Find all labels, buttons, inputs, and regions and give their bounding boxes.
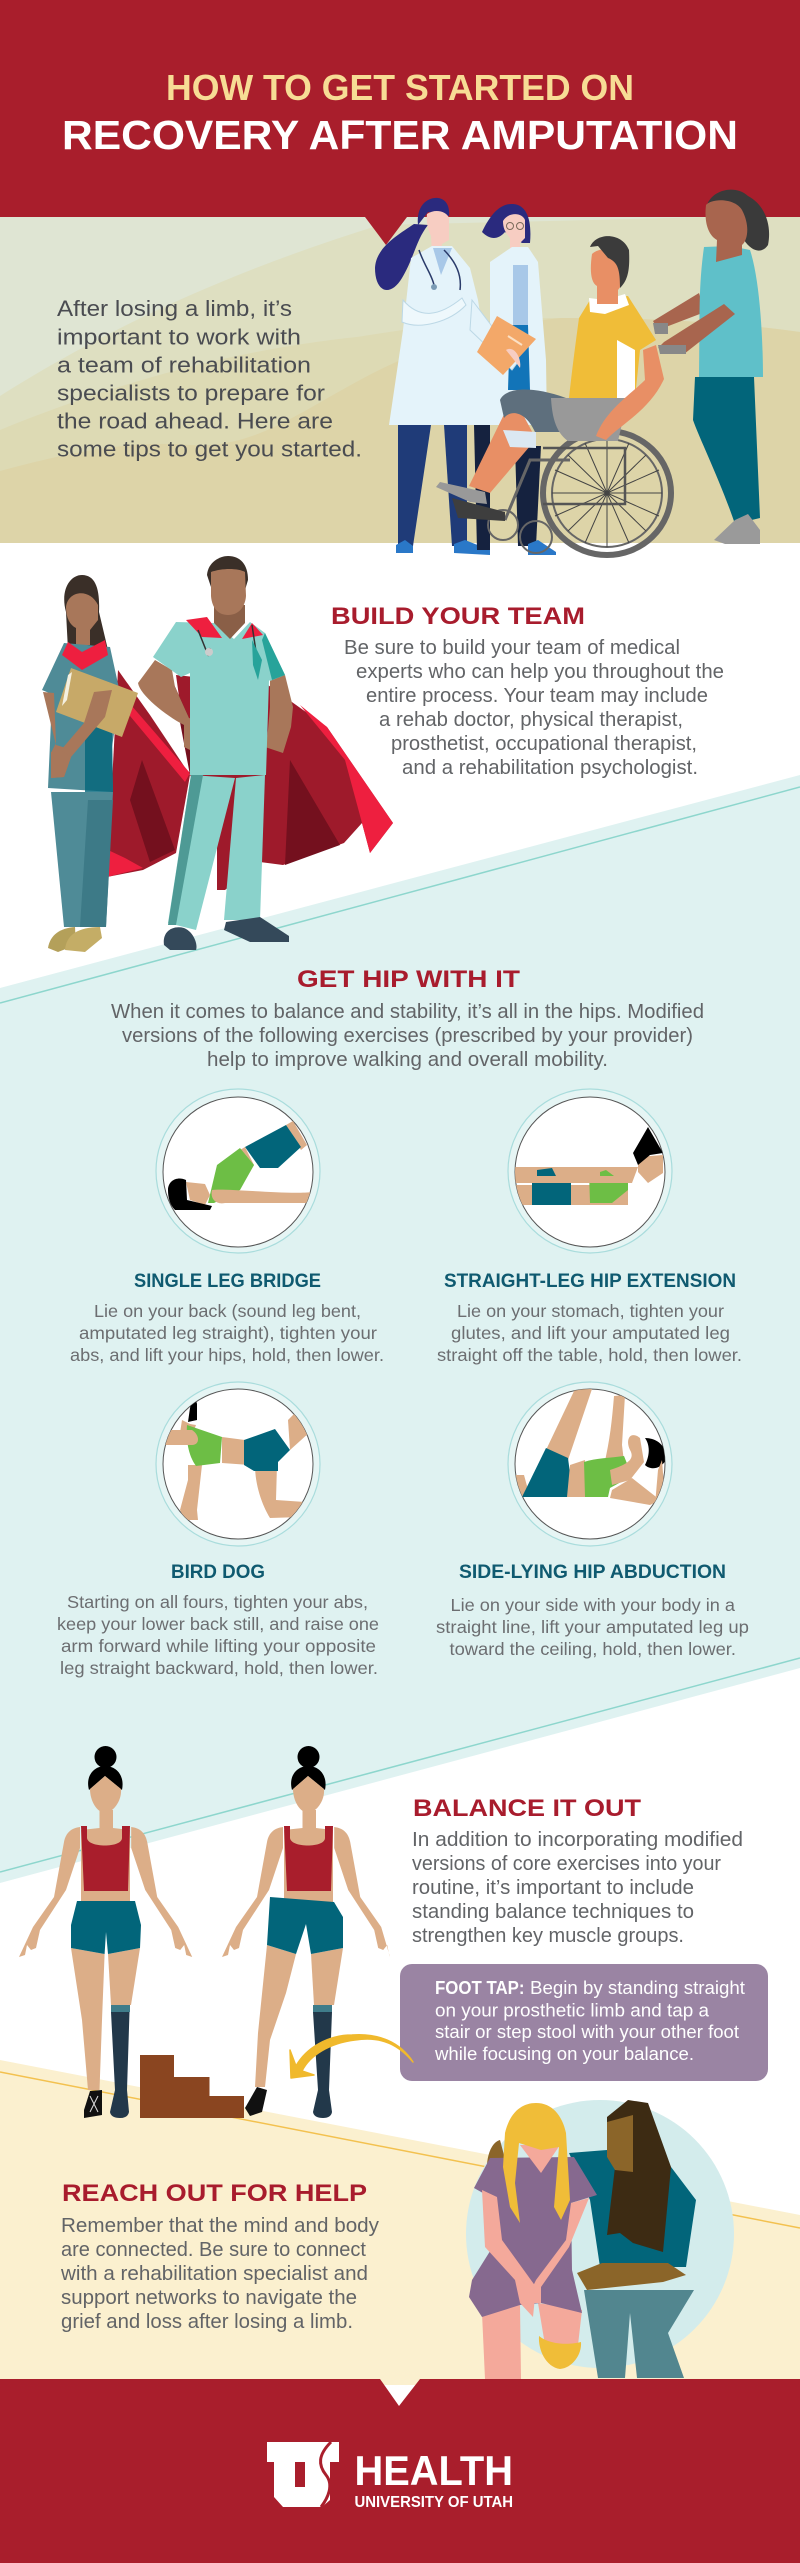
section: build your team: Be sure to build your team of medical [344, 636, 680, 659]
section: balance it out: In addition to incorporating modified [412, 1828, 743, 1851]
illustration: medical heroes with capes [42, 556, 393, 952]
section: balance it out: standing balance techniques to [412, 1900, 694, 1923]
exercise label: straight-leg hip extension: straight off the table, hold, then lower. [437, 1345, 742, 1365]
illustration: medical team with wheelchair patient [375, 190, 769, 555]
title: RECOVERY AFTER AMPUTATION [62, 112, 738, 158]
exercise label: bird dog [57, 1562, 379, 1678]
exercise label: side-lying hip abduction [436, 1562, 749, 1659]
exercise label: bird dog: arm forward while lifting your opposite [61, 1636, 376, 1656]
section: reach out for help: are connected. Be sure to connect [61, 2238, 366, 2261]
nurse pushing wheelchair [653, 190, 769, 544]
intro text: specialists to prepare for [57, 380, 326, 406]
intro text [57, 296, 362, 462]
exercise label: side-lying hip abduction: straight line, lift your amputated leg up [436, 1617, 749, 1637]
illustration: standing woman [19, 1746, 192, 2118]
intro text: the road ahead. Here are [57, 408, 333, 434]
exercise label: single leg bridge: amputated leg straight), tighten your [79, 1323, 377, 1343]
hero background [0, 210, 800, 543]
section: build your team [331, 603, 724, 779]
exercise: bird dog [156, 1382, 320, 1546]
title [62, 67, 738, 158]
exercise label: side-lying hip abduction: SIDE-LYING HIP ABDUCTION [459, 1562, 726, 1583]
patient in wheelchair [436, 236, 686, 521]
friend with blonde hair [469, 2103, 597, 2379]
callout: foot tap: FOOT TAP: [435, 1978, 524, 1998]
callout: foot tap: on your prosthetic limb and tap a [435, 2000, 710, 2020]
section: reach out for help: with a rehabilitation specialist and [60, 2262, 368, 2285]
section: build your team: entire process. Your team may include [366, 684, 708, 707]
section: build your team: and a rehabilitation psychologist. [402, 756, 698, 779]
wheelchair [488, 431, 671, 555]
section: build your team: a rehab doctor, physical therapist, [379, 708, 683, 731]
section: build your team: experts who can help you throughout the [356, 660, 724, 683]
woman in scrubs [42, 575, 138, 952]
exercise label: straight-leg hip extension [437, 1271, 742, 1365]
exercise label: bird dog: keep your lower back still, and raise one [57, 1614, 379, 1634]
section: balance it out: routine, it’s important to include [412, 1876, 694, 1899]
illustration: woman tapping step [222, 1746, 390, 2118]
exercise label: side-lying hip abduction: toward the ceiling, hold, then lower. [450, 1639, 736, 1659]
section: reach out for help [60, 2180, 380, 2333]
callout: foot tap [400, 1964, 768, 2081]
logo: University of Utah Health: UNIVERSITY OF UTAH [354, 2494, 513, 2511]
section: get hip with it: versions of the following exercises (prescribed by your provider) [122, 1024, 693, 1047]
exercise label: side-lying hip abduction: Lie on your side with your body in a [450, 1595, 735, 1615]
exercise: single leg bridge [156, 1089, 320, 1253]
logo: University of Utah Health [267, 2442, 513, 2511]
exercise label: straight-leg hip extension: Lie on your stomach, tighten your [457, 1301, 724, 1321]
exercise label: single leg bridge [70, 1271, 384, 1365]
exercise label: straight-leg hip extension: glutes, and lift your amputated leg [451, 1323, 730, 1343]
exercise: side-lying hip abduction [508, 1382, 672, 1546]
callout: foot tap: while focusing on your balance. [434, 2044, 694, 2064]
section: balance it out: BALANCE IT OUT [413, 1795, 641, 1822]
logo: University of Utah Health: HEALTH [354, 2447, 513, 2494]
intro text: After losing a limb, it’s [57, 296, 292, 321]
section: get hip with it: When it comes to balance and stability, it’s all in the hips. Modified [111, 1000, 704, 1023]
exercise label: bird dog: BIRD DOG [171, 1562, 265, 1583]
exercise label: straight-leg hip extension: STRAIGHT-LEG HIP EXTENSION [444, 1271, 736, 1292]
intro text: some tips to get you started. [57, 436, 362, 462]
man's cape [176, 675, 393, 890]
exercise label: bird dog: Starting on all fours, tighten your abs, [67, 1592, 368, 1612]
section: reach out for help: REACH OUT FOR HELP [62, 2180, 367, 2207]
doctor with ponytail [375, 198, 497, 555]
man in scrubs [138, 556, 293, 950]
exercise label: single leg bridge: abs, and lift your hips, hold, then lower. [70, 1345, 384, 1365]
section: balance it out: strengthen key muscle groups. [412, 1924, 684, 1947]
arrow: yellow curved [290, 2035, 413, 2078]
section: build your team: BUILD YOUR TEAM [331, 603, 585, 630]
icon: step stool [140, 2055, 244, 2118]
doctor with glasses [470, 204, 556, 555]
section: reach out for help: Remember that the mind and body [61, 2214, 380, 2237]
section: balance it out: versions of core exercises into your [412, 1852, 721, 1875]
friend with brown hair [487, 2100, 696, 2378]
exercise label: bird dog: leg straight backward, hold, then lower. [60, 1658, 378, 1678]
cream section background [0, 2060, 800, 2385]
header band [0, 0, 800, 245]
intro text: a team of rehabilitation [57, 352, 311, 378]
section: build your team: prosthetist, occupational therapist, [391, 732, 697, 755]
section: get hip with it: GET HIP WITH IT [297, 966, 520, 993]
woman's cape [107, 670, 190, 877]
footer band [0, 2379, 800, 2563]
teal section background [0, 775, 800, 1883]
exercise label: single leg bridge: Lie on your back (sound leg bent, [94, 1301, 361, 1321]
section: reach out for help: grief and loss after losing a limb. [61, 2310, 353, 2333]
illustration: two friends comforting [466, 2100, 734, 2379]
callout: foot tap: Begin by standing straight [530, 1978, 745, 1998]
callout: foot tap: stair or step stool with your other foot [435, 2022, 739, 2042]
section: get hip with it: help to improve walking and overall mobility. [207, 1048, 608, 1071]
section: reach out for help: support networks to navigate the [61, 2286, 357, 2309]
exercise label: single leg bridge: SINGLE LEG BRIDGE [134, 1271, 321, 1292]
exercise: straight-leg hip extension [508, 1089, 672, 1253]
title: HOW TO GET STARTED ON [166, 67, 634, 108]
section: balance it out [412, 1795, 743, 1947]
section: get hip with it [111, 966, 704, 1071]
intro text: important to work with [57, 324, 301, 350]
